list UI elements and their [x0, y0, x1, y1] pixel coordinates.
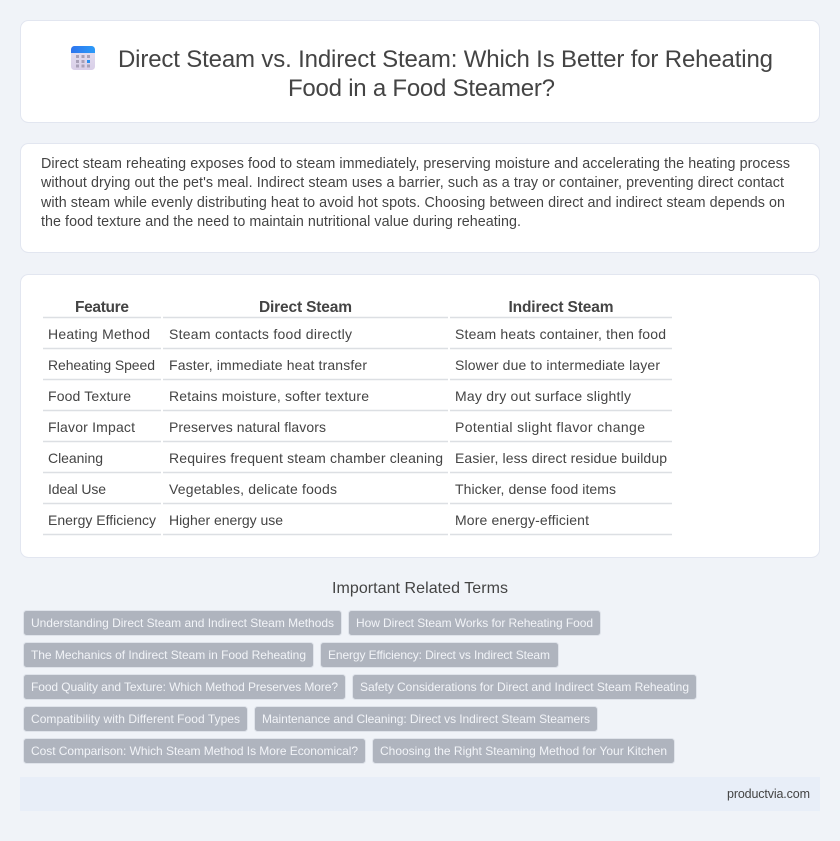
- row: reheating speed: Slower due to intermediate layer: [455, 357, 660, 373]
- row: flavor impact: Potential slight flavor change: [455, 419, 645, 435]
- footer source: productvia.com: [727, 787, 810, 801]
- row: heating method: Steam contacts food directly: [169, 326, 352, 342]
- title: Direct Steam vs. Indirect Steam: Which Is Better for Reheating: [118, 46, 773, 73]
- tag: [320, 642, 558, 668]
- related terms tags: [24, 610, 696, 764]
- title: Food in a Food Steamer?: [288, 75, 555, 102]
- tag: [254, 706, 598, 732]
- row: food texture: Food Texture: [48, 388, 131, 404]
- row: ideal use: [48, 481, 616, 497]
- tag: The Mechanics of Indirect Steam in Food Reheating: [31, 648, 306, 662]
- row: flavor impact: Flavor Impact: [48, 419, 135, 435]
- tag: [24, 674, 346, 700]
- title: [118, 46, 773, 102]
- intro paragraph: without drying out the pet's meal. Indirect steam uses a barrier, such as a tray or container, preventing direct contact: [40, 175, 784, 191]
- tag: Energy Efficiency: Direct vs Indirect Steam: [328, 648, 550, 662]
- tag: Safety Considerations for Direct and Indirect Steam Reheating: [360, 680, 689, 694]
- panel: introduction: [20, 144, 820, 252]
- row: energy efficiency: Energy Efficiency: [48, 512, 156, 528]
- tag: How Direct Steam Works for Reheating Food: [356, 616, 593, 630]
- tag: Food Quality and Texture: Which Method Preserves More?: [31, 680, 338, 694]
- row: energy efficiency: More energy-efficient: [455, 512, 589, 528]
- row: food texture: Retains moisture, softer texture: [169, 388, 369, 404]
- row: cleaning: [48, 450, 667, 466]
- heading: related terms: Important Related Terms: [332, 580, 508, 597]
- row: cleaning: Cleaning: [48, 450, 103, 466]
- tag: [24, 642, 314, 668]
- row: flavor impact: [48, 419, 645, 435]
- footer: [20, 777, 820, 811]
- row: ideal use: Vegetables, delicate foods: [169, 481, 337, 497]
- intro paragraph: Direct steam reheating exposes food to steam immediately, preserving moisture and accelerating the heating process: [41, 156, 790, 172]
- intro paragraph: the food texture and the need to maintain nutritional value during reheating.: [41, 214, 521, 230]
- intro paragraph: with steam while evenly distributing heat to avoid hot spots. Choosing between direct and indirect steam depends on: [40, 195, 785, 211]
- row: reheating speed: [48, 357, 660, 373]
- tag: [348, 610, 600, 636]
- tag: Cost Comparison: Which Steam Method Is More Economical?: [31, 744, 358, 758]
- table header: Indirect Steam: [508, 299, 614, 316]
- panel: comparison table: [20, 274, 820, 558]
- row: heating method: Heating Method: [48, 326, 150, 342]
- row: reheating speed: Faster, immediate heat transfer: [169, 357, 367, 373]
- row: ideal use: Thicker, dense food items: [455, 481, 616, 497]
- panel: header: [20, 20, 820, 122]
- row: energy efficiency: Higher energy use: [169, 512, 283, 528]
- tag: [352, 674, 696, 700]
- table header: [75, 299, 614, 316]
- tag: Choosing the Right Steaming Method for Your Kitchen: [380, 744, 667, 758]
- table header: Feature: [75, 299, 129, 316]
- row: flavor impact: Preserves natural flavors: [169, 419, 326, 435]
- row: ideal use: Ideal Use: [48, 481, 106, 497]
- tag: Maintenance and Cleaning: Direct vs Indirect Steam Steamers: [262, 712, 590, 726]
- icon: calendar: [71, 46, 95, 70]
- tag: [24, 738, 366, 764]
- row: food texture: [48, 388, 631, 404]
- row: cleaning: Requires frequent steam chamber cleaning: [169, 450, 443, 466]
- tag: [372, 738, 674, 764]
- row: food texture: May dry out surface slightly: [455, 388, 631, 404]
- tag: Compatibility with Different Food Types: [31, 712, 240, 726]
- tag: Understanding Direct Steam and Indirect Steam Methods: [31, 616, 334, 630]
- row: heating method: [48, 326, 666, 342]
- tag: [24, 610, 342, 636]
- intro paragraph: [40, 156, 790, 230]
- table header: Direct Steam: [259, 299, 352, 316]
- tag: [24, 706, 248, 732]
- row: reheating speed: Reheating Speed: [48, 357, 155, 373]
- row: energy efficiency: [48, 512, 589, 528]
- row: heating method: Steam heats container, then food: [455, 326, 666, 342]
- row: cleaning: Easier, less direct residue buildup: [455, 450, 667, 466]
